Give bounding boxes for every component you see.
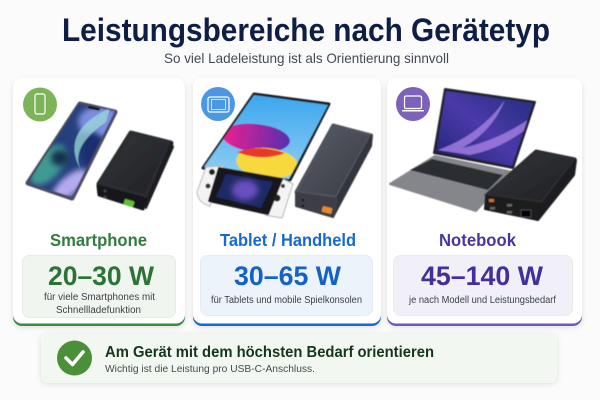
value box: notebook: je nach Modell und Leistungsbedarf xyxy=(408,295,556,306)
value box: smartphone: Schnellladefunktion xyxy=(56,305,141,316)
title: Leistungsbereiche nach Gerätetyp xyxy=(62,12,550,48)
panel: takeaway xyxy=(41,334,557,383)
value box: tablet and handheld xyxy=(200,256,372,316)
panel: notebook xyxy=(387,78,582,326)
icon: notebook xyxy=(396,87,430,121)
value box: smartphone: für viele Smartphones mit xyxy=(44,292,155,303)
takeaway heading: Am Gerät mit dem höchsten Bedarf orientieren xyxy=(105,344,434,361)
icon: check mark xyxy=(57,340,92,376)
panel: tablet and handheld xyxy=(193,78,381,326)
subtitle: So viel Ladeleistung ist als Orientierung sinnvoll xyxy=(164,50,449,66)
icon: tablet xyxy=(201,87,235,121)
heading: smartphone: Smartphone xyxy=(50,230,147,250)
icon: smartphone xyxy=(23,88,57,122)
value box: tablet and handheld: für Tablets und mobile Spielkonsolen xyxy=(211,295,362,306)
heading: tablet and handheld: Tablet / Handheld xyxy=(220,230,356,250)
takeaway note: Wichtig ist die Leistung pro USB-C-Anschluss. xyxy=(105,363,315,375)
value box: notebook xyxy=(394,256,572,316)
heading: notebook: Notebook xyxy=(439,230,516,250)
image: notebook and power bank xyxy=(390,85,576,220)
value box: notebook: 45–140 W xyxy=(421,261,543,291)
image: tablet, handheld and power bank xyxy=(195,90,372,218)
value box: tablet and handheld: 30–65 W xyxy=(234,261,341,291)
value box: smartphone: 20–30 W xyxy=(48,261,154,291)
image: smartphone and power bank xyxy=(20,100,173,209)
value box: smartphone xyxy=(22,256,176,318)
panel: smartphone xyxy=(13,78,185,326)
